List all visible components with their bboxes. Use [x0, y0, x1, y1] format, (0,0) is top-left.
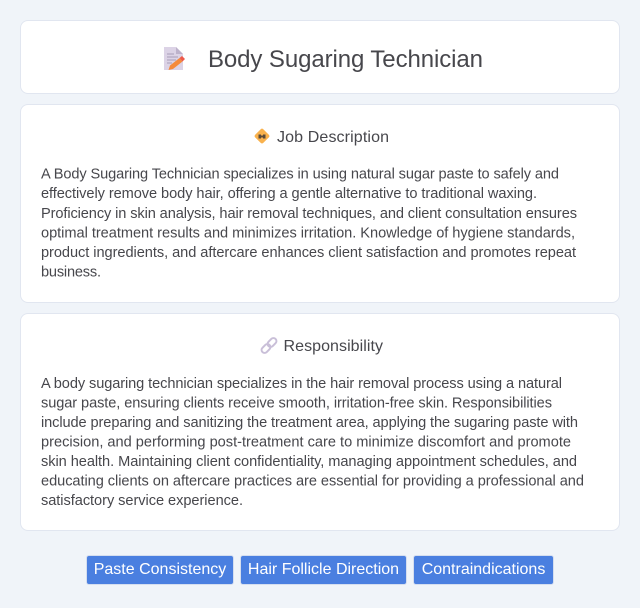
heading: responsibility: Responsibility [284, 338, 383, 355]
text block: responsibility: A body sugaring technician specializes in the hair removal process using a natural [41, 376, 562, 392]
panel: title card [20, 20, 620, 94]
text block: job description: product ingredients, and aftercare enhances client satisfaction and promotes repeat [41, 245, 576, 261]
panel: job description card [20, 104, 620, 303]
text block: responsibility: educating clients on aftercare practices are essential for providing a professional and [41, 474, 584, 490]
button: Hair Follicle Direction: Hair Follicle Direction [248, 561, 399, 578]
text block: responsibility: satisfactory service experience. [41, 493, 243, 509]
text block: job description: effectively remove body hair, offering a gentle alternative to traditional waxing. [41, 186, 537, 202]
panel: responsibility card [20, 313, 620, 531]
text block: responsibility: skin health. Maintaining client confidentiality, managing appointment schedules, and [41, 454, 577, 470]
text block: responsibility: precision, and performing post-treatment care to minimize discomfort and promote [41, 434, 571, 450]
heading: job description: Job Description [277, 129, 389, 146]
button: Contraindications: Contraindications [422, 561, 545, 578]
button: Contraindications [413, 555, 554, 585]
text block: job description: Proficiency in skin analysis, hair removal techniques, and client consultation ensures [41, 206, 577, 222]
button: Paste Consistency: Paste Consistency [94, 561, 226, 578]
text block: job description: optimal treatment results and minimizes irritation. Knowledge of hygiene standards, [41, 226, 575, 242]
heading: title: Body Sugaring Technician [208, 46, 483, 73]
text block: responsibility: include preparing and sanitizing the treatment area, applying the sugaring paste with [41, 415, 578, 431]
text block: responsibility: sugar paste, ensuring clients receive smooth, irritation-free skin. Responsibilities [41, 396, 552, 412]
button: Paste Consistency [86, 555, 234, 585]
text block: job description: business. [41, 264, 101, 280]
button: Hair Follicle Direction [240, 555, 407, 585]
text block: job description: A Body Sugaring Technician specializes in using natural sugar paste to safely and [41, 166, 559, 182]
